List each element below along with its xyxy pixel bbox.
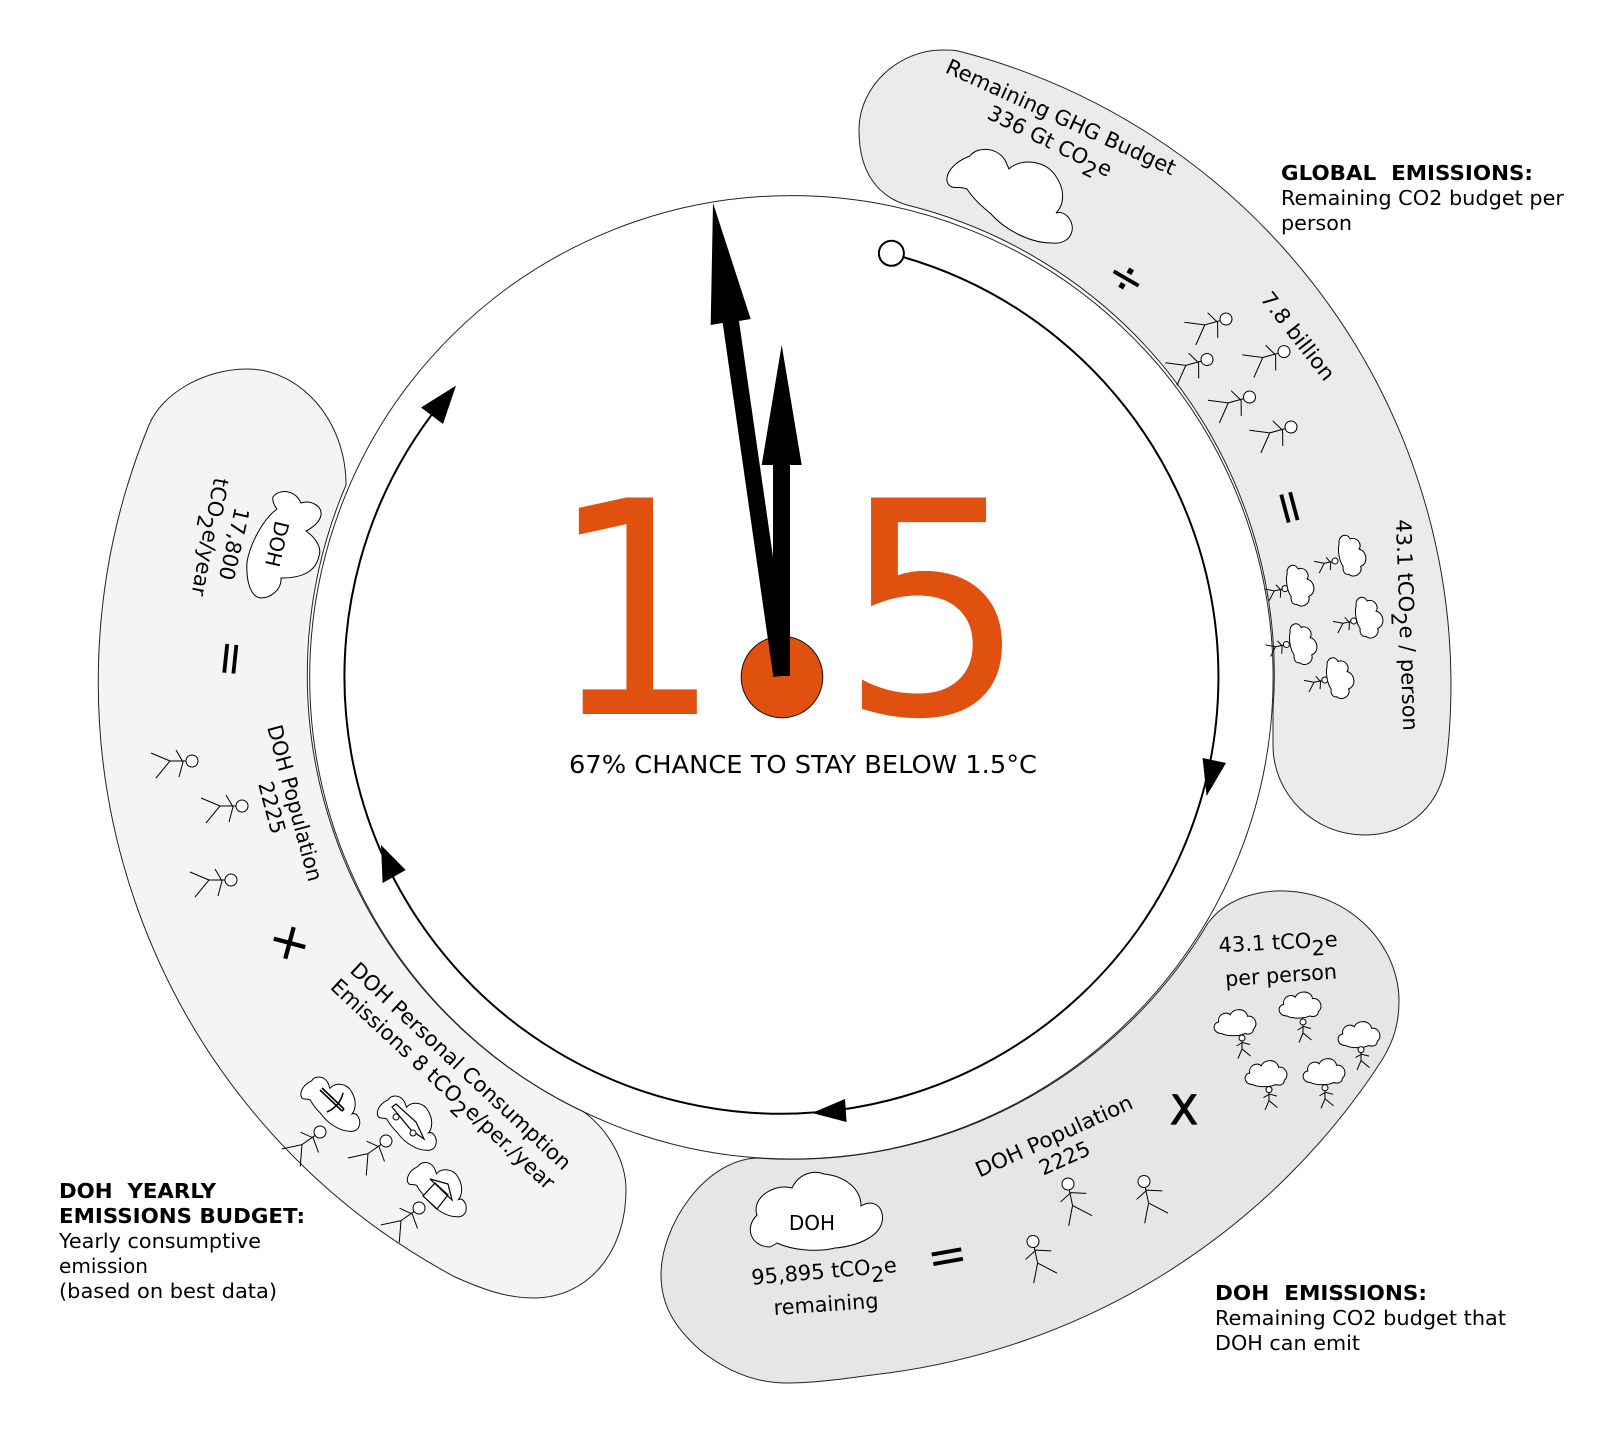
side note: global emissions: person (1281, 211, 1352, 235)
text: remaining: remaining (773, 1289, 879, 1320)
text: 43.1 tCO2e: 2 (1311, 936, 1326, 961)
side note: DOH yearly emissions budget: DOH YEARLY (59, 1179, 217, 1203)
side note: DOH yearly emissions budget: (based on best data) (59, 1279, 277, 1303)
side note: DOH yearly emissions budget: emission (59, 1254, 148, 1278)
side note: DOH yearly emissions budget: EMISSIONS BUDGET: (59, 1204, 305, 1228)
text: 2225: 2225 (1035, 1136, 1094, 1180)
text: 7.8 billion: 7.8 billion (1256, 287, 1340, 385)
panel: DOH emissions (661, 891, 1399, 1383)
icon: house cloud and person (379, 1162, 466, 1245)
text: 95,895 tCO2e: 95,895 tCO (750, 1255, 872, 1290)
arc line (344, 257, 1218, 1114)
icon: plane cloud and person (280, 1077, 360, 1169)
clock minute hand (711, 203, 790, 677)
text: 336 Gt CO2e: 2 (1078, 156, 1101, 183)
text: emissions per person per year: 2 (445, 1096, 471, 1123)
text: DOH personal consumption: DOH Personal Consumption (345, 958, 576, 1175)
equals sign: = (203, 637, 261, 681)
equals sign: = (922, 1225, 972, 1287)
text: 43.1 tCO2e per person: 43.1 tCO (1391, 519, 1418, 613)
text: 43.1 tCO2e per person: 2 (1386, 612, 1411, 626)
panel shape: global emissions (859, 50, 1451, 835)
text: tCO2e/year: e/year (186, 528, 223, 598)
icon: large cloud (947, 149, 1072, 243)
text: 336 Gt CO2e: e (1094, 155, 1116, 182)
caption: chance to stay below 1.5C: 67% CHANCE TO STAY BELOW 1.5°C (569, 750, 1037, 779)
side note: global emissions: Remaining CO2 budget per (1281, 186, 1565, 210)
panel shape: DOH emissions (661, 891, 1399, 1383)
text: 95,895 tCO2e: 2 (870, 1262, 886, 1287)
text: remaining GHG budget: Remaining GHG Budget (942, 55, 1180, 180)
clock outer ring (310, 196, 1273, 1159)
text: DOH population: DOH Population (972, 1090, 1137, 1182)
cycle arrow: circular path with start circle and arrowheads (344, 241, 1226, 1122)
text: tCO2e/year: tCO (202, 476, 233, 519)
text: 95,895 tCO2e: e (883, 1253, 898, 1278)
icon: DOH cloud: DOH (260, 519, 294, 569)
side note: global emissions (1281, 161, 1565, 235)
text: 17,800: 17,800 (214, 505, 254, 582)
text: 2225: 2225 (253, 779, 290, 837)
people with clouds (1264, 532, 1386, 701)
people group: DOH population (1021, 1172, 1169, 1284)
panel: DOH yearly emissions budget (98, 369, 626, 1298)
text: 336 Gt CO2e: 336 Gt CO (984, 101, 1092, 170)
icon: car cloud and person (346, 1096, 436, 1178)
icon: DOH cloud (750, 1172, 882, 1250)
arrowhead: lower left (381, 845, 406, 883)
start circle (879, 241, 904, 266)
text: 43.1 tCO2e per person: e / person (1395, 625, 1422, 731)
side note: DOH yearly emissions budget: Yearly consumptive (58, 1229, 261, 1253)
number: 1: 1 (549, 440, 722, 785)
side note: DOH emissions: Remaining CO2 budget that (1215, 1306, 1506, 1330)
people group: DOH population (151, 750, 248, 897)
side note: global emissions: GLOBAL EMISSIONS: (1281, 161, 1533, 185)
text: emissions per person per year: e/per./year (460, 1099, 560, 1195)
icon: DOH cloud (247, 491, 321, 598)
multiply sign: X (1170, 1088, 1198, 1134)
multiply sign: + (261, 908, 319, 977)
side note: DOH emissions: DOH EMISSIONS: (1215, 1281, 1427, 1305)
text: emissions per person per year: Emissions 8 tCO (326, 974, 467, 1108)
arrowhead: bottom (812, 1099, 847, 1122)
clock hour hand (762, 345, 802, 676)
text: 43.1 tCO2e: 43.1 tCO (1218, 929, 1312, 957)
side note: DOH yearly emissions budget (58, 1179, 305, 1303)
side note: DOH emissions (1215, 1281, 1506, 1355)
people group: global population (1165, 307, 1301, 454)
icon: DOH cloud: DOH (789, 1211, 835, 1235)
side note: DOH emissions: DOH can emit (1215, 1331, 1360, 1355)
text: DOH population: DOH Population (262, 722, 327, 884)
panel shape: DOH yearly budget (98, 369, 626, 1298)
text: tCO2e/year: 2 (191, 513, 217, 531)
panel: global emissions (859, 50, 1451, 835)
equals sign: = (1260, 481, 1322, 533)
arrowhead: upper left (421, 386, 456, 424)
clock centre dot (decimal point) (741, 636, 823, 718)
arrowhead: right (1203, 758, 1226, 796)
people with clouds (1214, 992, 1380, 1110)
number: 5: 5 (839, 439, 1028, 785)
text: per person: per person (1224, 959, 1338, 991)
text: 43.1 tCO2e: e (1324, 927, 1338, 952)
divide sign: ÷ (1097, 244, 1157, 310)
